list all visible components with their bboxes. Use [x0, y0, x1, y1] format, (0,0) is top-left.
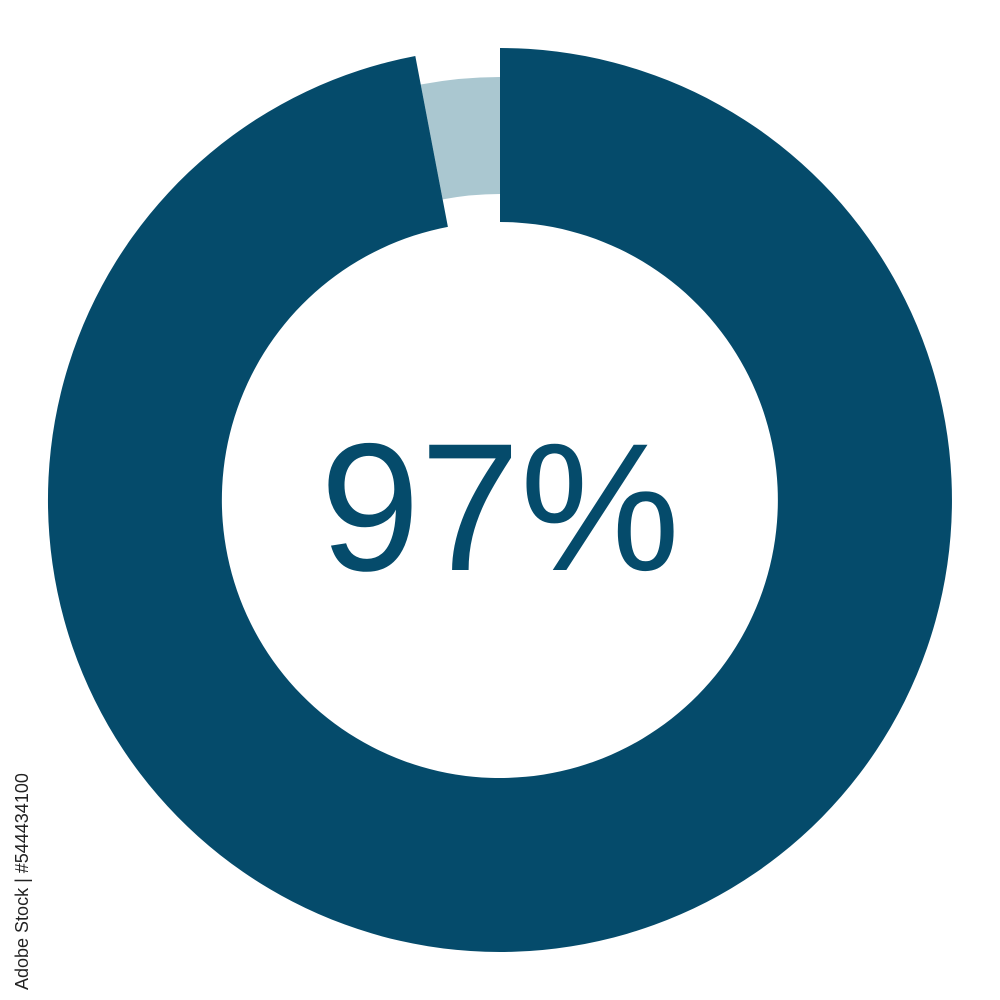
- percentage label: 97%: [320, 405, 680, 609]
- watermark id text: Adobe Stock | #544434100: [12, 773, 32, 990]
- arc: remaining 3% (light): [421, 77, 500, 199]
